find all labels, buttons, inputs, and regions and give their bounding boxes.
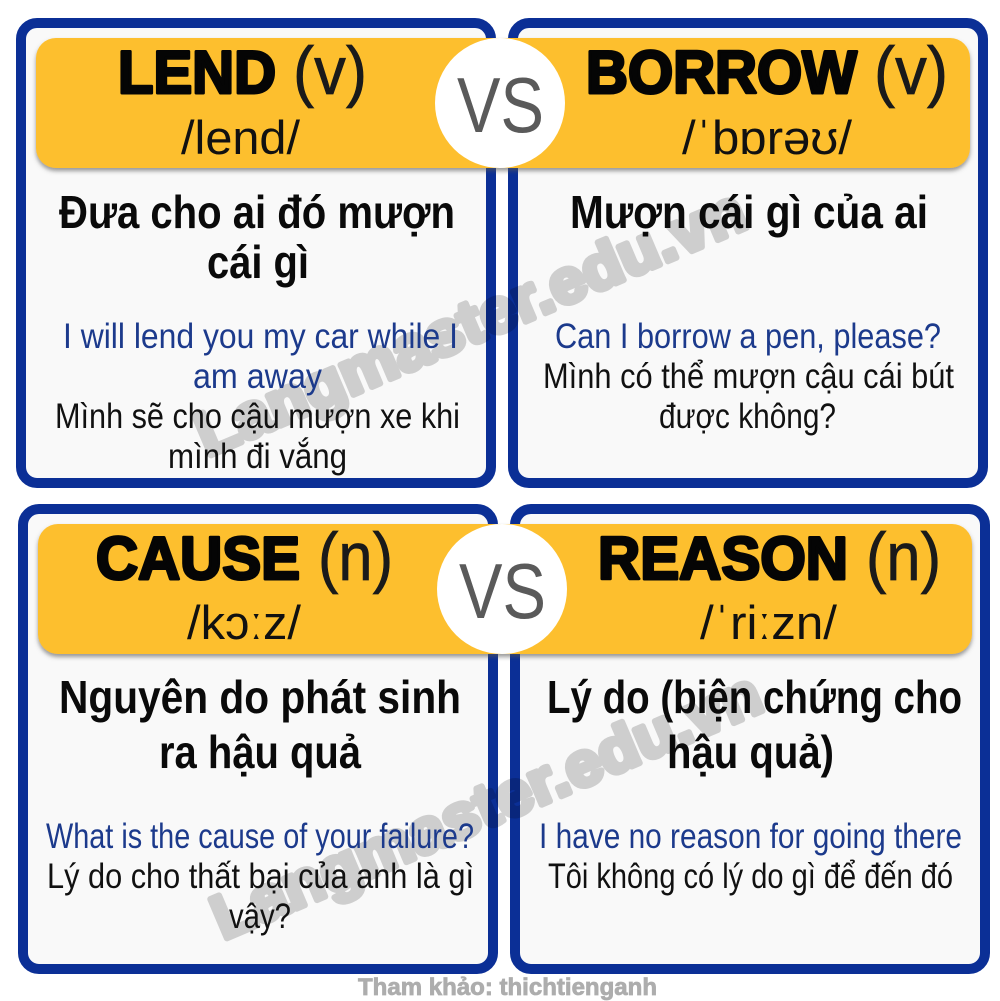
definition: cause: ra hậu quả — [159, 726, 361, 778]
definition: reason — [547, 671, 962, 778]
pronunciation: reason: /ˈriːzn/ — [700, 596, 838, 649]
pronunciation: borrow: /ˈbɒrəʊ/ — [682, 111, 853, 164]
lend content — [55, 33, 460, 476]
example: borrow: Can I borrow a pen, please? — [555, 317, 941, 356]
heading: reason: REASON — [598, 525, 848, 592]
pronunciation: cause: /kɔːz/ — [187, 596, 302, 649]
example: reason — [539, 817, 962, 896]
heading: reason — [598, 519, 941, 595]
heading: cause: (n) — [318, 519, 393, 595]
definition: borrow: Mượn cái gì của ai — [570, 186, 928, 238]
badge: bottom VS: VS — [459, 547, 546, 635]
heading: lend — [118, 33, 367, 109]
borrow content — [543, 33, 954, 436]
watermark: top: Langmaster.edu.vn — [186, 176, 756, 470]
pronunciation: lend: /lend/ — [181, 111, 301, 164]
watermark: bottom: Langmaster.edu.vn — [202, 659, 772, 953]
header band: top — [36, 38, 970, 168]
example: lend: am away — [193, 357, 322, 396]
example: cause: Lý do cho thất bại của anh là gì — [47, 857, 474, 896]
example: borrow: được không? — [659, 397, 836, 436]
panel: cause frame — [23, 509, 493, 969]
badge: top VS — [435, 38, 565, 168]
example: cause: What is the cause of your failure? — [46, 817, 474, 856]
heading: reason: (n) — [866, 519, 941, 595]
heading: lend: (v) — [293, 33, 367, 109]
heading: borrow: BORROW — [586, 39, 857, 106]
source credit: Tham khảo: thichtienganh — [358, 974, 657, 1001]
example: cause: vậy? — [229, 897, 291, 936]
badge: top VS: VS — [457, 61, 544, 149]
cause content — [46, 519, 474, 936]
panel: lend frame — [21, 23, 491, 483]
heading: cause — [96, 519, 393, 595]
example: lend: Mình sẽ cho cậu mượn xe khi — [55, 397, 460, 436]
badge: bottom VS — [437, 524, 567, 654]
heading: lend: LEND — [118, 39, 276, 106]
definition: cause — [59, 671, 461, 778]
panel: reason frame — [515, 509, 985, 969]
reason content — [539, 519, 962, 896]
example: lend — [55, 317, 460, 476]
example: borrow — [543, 317, 954, 436]
example: cause — [46, 817, 474, 936]
heading: cause: CAUSE — [96, 525, 300, 592]
definition: cause: Nguyên do phát sinh — [59, 671, 461, 723]
definition: lend — [59, 186, 455, 288]
heading: borrow: (v) — [874, 33, 948, 109]
example: lend: mình đi vắng — [168, 437, 347, 476]
panel: borrow frame — [513, 23, 983, 483]
header band: bottom — [38, 524, 972, 654]
definition: lend: cái gì — [207, 236, 309, 288]
definition: reason: hậu quả) — [667, 726, 834, 778]
example: borrow: Mình có thể mượn cậu cái bút — [543, 357, 954, 396]
heading: borrow — [586, 33, 948, 109]
example: lend: I will lend you my car while I — [63, 317, 458, 356]
definition: lend: Đưa cho ai đó mượn — [59, 186, 455, 238]
